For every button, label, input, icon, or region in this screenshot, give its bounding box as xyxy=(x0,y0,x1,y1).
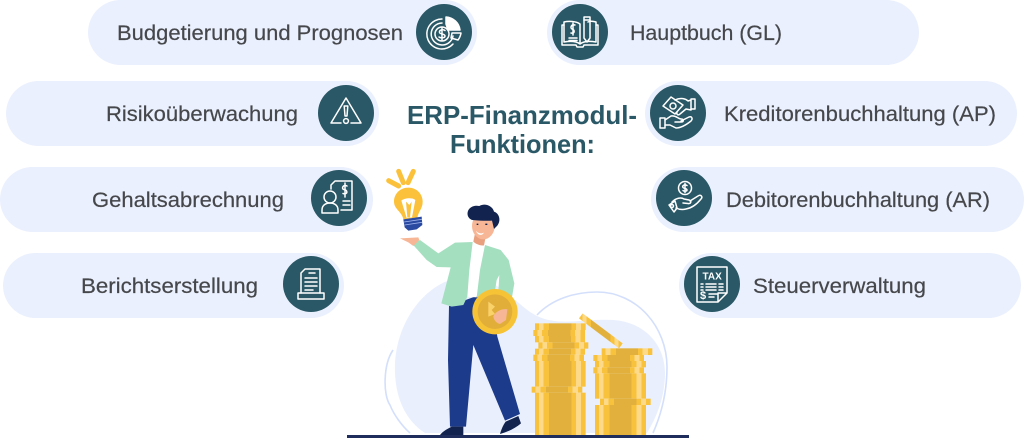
hair xyxy=(468,205,499,229)
label: Risikoüberwachung xyxy=(106,103,298,126)
jacket xyxy=(412,240,473,307)
label: Hauptbuch (GL) xyxy=(630,22,782,45)
light bulb xyxy=(394,188,423,219)
title xyxy=(407,100,637,159)
panel: Hauptbuch (GL) xyxy=(547,0,919,65)
icon: hands exchanging money xyxy=(660,97,695,128)
label: Steuerverwaltung xyxy=(753,275,926,298)
illustration: person with coins and light bulb xyxy=(347,171,689,438)
icon: payroll document xyxy=(322,181,352,213)
light rays xyxy=(389,171,413,186)
left stack xyxy=(532,323,588,435)
neck and face xyxy=(473,233,486,245)
shirt xyxy=(466,243,486,297)
icon: report printer xyxy=(298,269,324,299)
label: Gehaltsabrechnung xyxy=(92,189,284,212)
icon: hand holding coin xyxy=(669,182,702,212)
icon: warning triangle xyxy=(331,98,361,123)
background blob xyxy=(395,277,665,433)
right stack xyxy=(593,348,652,435)
label: Debitorenbuchhaltung (AR) xyxy=(726,189,990,212)
panel: Debitorenbuchhaltung (AR) xyxy=(651,167,1024,232)
panel: Risikoüberwachung xyxy=(6,81,379,146)
label: Berichtserstellung xyxy=(81,275,258,298)
open hand xyxy=(400,237,419,246)
title: Funktionen: xyxy=(450,129,595,159)
panel: Berichtserstellung xyxy=(3,253,344,318)
trousers xyxy=(448,296,520,427)
panel: Budgetierung und Prognosen xyxy=(88,0,477,65)
ground line xyxy=(347,435,689,438)
icon: pie chart with dollar xyxy=(427,17,461,49)
outline circles xyxy=(385,292,667,433)
title: ERP-Finanzmodul- xyxy=(407,100,637,130)
icon: tax form: TAX xyxy=(702,272,722,282)
person xyxy=(389,171,521,435)
hand on coin xyxy=(493,309,507,324)
shoes xyxy=(440,427,463,435)
panel: Steuerverwaltung xyxy=(679,253,1021,318)
icon: tax form xyxy=(697,267,727,302)
panel: Kreditorenbuchhaltung (AP) xyxy=(645,81,1017,146)
tilted coin xyxy=(579,313,623,348)
panel: Gehaltsabrechnung xyxy=(0,167,373,232)
eyes xyxy=(477,222,487,226)
coin stacks xyxy=(532,313,652,435)
label: Kreditorenbuchhaltung (AP) xyxy=(724,103,996,126)
large coin xyxy=(472,289,518,334)
icon: ledger book with pencil xyxy=(562,17,598,47)
icon: tax form: $ xyxy=(700,290,706,302)
label: Budgetierung und Prognosen xyxy=(117,22,403,45)
